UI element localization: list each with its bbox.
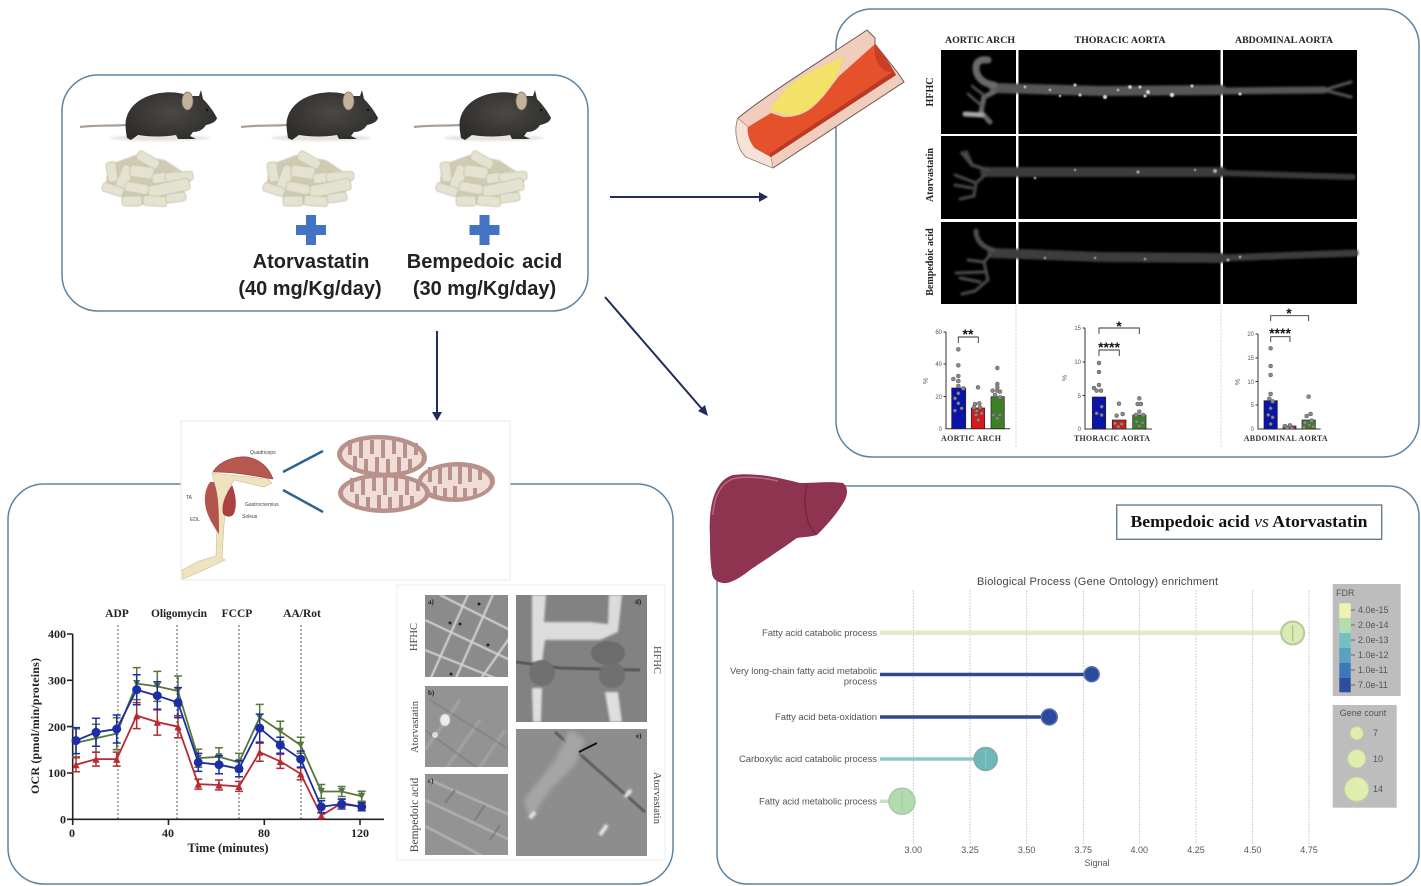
- x-axis tick labels: 4.50: [1244, 845, 1261, 855]
- blue series: [72, 675, 366, 813]
- image: Bempedoic acid aorta: [941, 222, 1357, 304]
- legend: gene count: 10: [1373, 754, 1383, 764]
- bar chart: abdominal aorta: 0: [1251, 427, 1255, 433]
- chart title: Biological Process (Gene Ontology) enrichment: [977, 576, 1218, 588]
- zoom lines: [283, 451, 323, 512]
- legend: gene count: 7: [1373, 728, 1378, 738]
- pellets: control: [101, 150, 193, 207]
- micrograph d: [516, 595, 647, 722]
- micrograph letters: e): [636, 732, 642, 740]
- label: bempedoic acid dose: Bempedoic acid: [407, 251, 562, 273]
- electron micrographs: [397, 585, 665, 860]
- plus icon: bempedoic acid: [470, 215, 500, 245]
- row labels: Atorvastatin: [925, 148, 936, 202]
- legend: gene count: Gene count: [1340, 708, 1387, 718]
- treatment labels: FCCP: [222, 608, 252, 620]
- x-axis tick labels: 120: [351, 826, 369, 840]
- panel: skeletal muscle: [8, 484, 673, 884]
- bar chart: aortic arch: 20: [935, 395, 943, 401]
- treatment labels: Oligomycin: [151, 608, 208, 620]
- row: fatty acid catabolic process: Fatty acid catabolic process: [762, 628, 877, 639]
- bar chart: aortic arch: AORTIC ARCH: [941, 434, 1002, 443]
- bar chart: abdominal aorta: ABDOMINAL AORTA: [1244, 434, 1328, 443]
- icon: leg muscles: [182, 457, 273, 579]
- legend: FDR: 7.0e-11: [1358, 680, 1388, 690]
- bar chart: thoracic aorta: 0: [1078, 427, 1082, 433]
- bar chart: thoracic aorta: 15: [1074, 326, 1082, 332]
- micrograph group labels: Atorvastatin: [651, 772, 662, 825]
- panel: aorta: [836, 9, 1419, 457]
- bar chart: thoracic aorta: *: [1116, 318, 1122, 334]
- y-axis title: OCR (pmol/min/proteins): [28, 658, 42, 794]
- y-axis tick labels: 0: [60, 812, 66, 826]
- bar chart: abdominal aorta: 20: [1247, 332, 1255, 338]
- bar chart: aortic arch: 0: [939, 427, 943, 433]
- bar chart: aortic arch: [923, 326, 1010, 443]
- x-axis tick labels: 3.00: [905, 845, 922, 855]
- column headings: ABDOMINAL AORTA: [1235, 35, 1334, 45]
- row labels: [925, 78, 936, 296]
- label: atorvastatin dose: (40 mg/Kg/day): [238, 278, 382, 300]
- dividers between charts: [1016, 305, 1221, 447]
- y-axis tick labels: 200: [48, 720, 66, 734]
- bar chart: abdominal aorta: 10: [1247, 380, 1255, 386]
- legend: FDR: 2.0e-13: [1358, 635, 1389, 645]
- bar chart: aortic arch: 40: [935, 362, 943, 368]
- mouse: bempedoic acid: [414, 90, 551, 141]
- x-axis tick labels: 4.00: [1131, 845, 1148, 855]
- column headings: [945, 35, 1334, 45]
- icon: mitochondria: [336, 433, 496, 513]
- micrograph letters: [428, 598, 642, 785]
- micrograph e: [516, 729, 647, 856]
- column headings: AORTIC ARCH: [945, 35, 1015, 45]
- arrow: to aorta: [610, 192, 768, 202]
- x-axis tick labels: 80: [258, 826, 270, 840]
- treatment labels: [105, 608, 321, 620]
- legend: FDR: 4.0e-15: [1358, 605, 1389, 615]
- x-axis tick labels: [69, 826, 369, 840]
- injection markers: [118, 625, 301, 819]
- bar chart: thoracic aorta: 5: [1078, 394, 1082, 400]
- title box: Bempedoic acid vs Atorvastatin: [1130, 512, 1368, 531]
- pellets: bempedoic acid: [435, 150, 527, 207]
- axes: [67, 634, 384, 825]
- micrograph a: [425, 595, 508, 677]
- x-axis tick labels: [905, 845, 1318, 855]
- x-axis tick labels: 3.75: [1075, 845, 1092, 855]
- pellets: atorvastatin: [262, 150, 354, 207]
- y-axis tick labels: [48, 627, 66, 826]
- y-axis tick labels: 400: [48, 627, 66, 641]
- row: fatty acid beta-oxidation: Fatty acid beta-oxidation: [775, 712, 877, 723]
- legend: FDR: FDR: [1336, 588, 1355, 598]
- x-axis title: Time (minutes): [188, 841, 268, 855]
- bar chart: aortic arch: %: [923, 378, 930, 384]
- x-axis tick labels: 3.50: [1018, 845, 1035, 855]
- micrograph group labels: HFHC: [409, 623, 420, 651]
- bar chart: thoracic aorta: ****: [1098, 339, 1120, 355]
- legend: FDR: 1.0e-12: [1358, 650, 1389, 660]
- x-axis tick labels: 3.25: [961, 845, 979, 855]
- OCR line chart: [28, 608, 384, 855]
- red series: [72, 703, 366, 819]
- muscle labels: Quadriceps: [250, 450, 276, 456]
- bar chart: abdominal aorta: *: [1286, 305, 1292, 321]
- label: bempedoic acid dose: (30 mg/Kg/day): [413, 278, 556, 300]
- panel: liver enrichment: [710, 474, 1419, 884]
- micrograph group labels: [409, 623, 662, 852]
- micrograph letters: b): [428, 689, 435, 697]
- bar chart: aortic arch: 60: [935, 330, 943, 336]
- legend: FDR: 1.0e-11: [1358, 665, 1388, 675]
- row: fatty acid metabolic process: Fatty acid metabolic process: [759, 796, 877, 808]
- row labels: HFHC: [925, 78, 936, 106]
- bar chart: abdominal aorta: ****: [1269, 325, 1291, 341]
- row: very long-chain fatty acid metabolic process: [730, 666, 1099, 688]
- title box: [1117, 505, 1382, 539]
- row: fatty acid beta-oxidation: [775, 709, 1057, 725]
- legend: FDR: 2.0e-14: [1358, 620, 1389, 630]
- plus icon: atorvastatin: [296, 215, 326, 245]
- row: fatty acid metabolic process: [759, 788, 915, 814]
- micrograph letters: d): [635, 598, 642, 606]
- bar chart: thoracic aorta: %: [1062, 375, 1069, 381]
- bar chart: thoracic aorta: [1062, 318, 1152, 443]
- grid lines: [913, 590, 1309, 845]
- bar chart: aortic arch: **: [963, 326, 974, 342]
- mouse: control: [80, 90, 217, 141]
- panel: diet groups: [62, 75, 588, 311]
- bar chart: thoracic aorta: THORACIC AORTA: [1074, 434, 1150, 443]
- arrow: to liver: [605, 297, 708, 416]
- label: atorvastatin dose: Atorvastatin: [253, 251, 369, 273]
- micrograph letters: a): [428, 598, 434, 606]
- micrograph b: [425, 686, 510, 770]
- muscle labels: EDL: [190, 517, 200, 523]
- arrow: to muscle: [432, 331, 442, 421]
- bar chart: thoracic aorta: 10: [1074, 360, 1082, 366]
- icon: liver: [710, 474, 847, 583]
- bar chart: abdominal aorta: 5: [1251, 403, 1255, 409]
- micrograph c: [425, 774, 510, 860]
- x-axis title: Signal: [1084, 858, 1110, 868]
- micrograph group labels: HFHC: [651, 646, 662, 674]
- micrograph letters: c): [428, 777, 434, 785]
- treatment labels: ADP: [105, 608, 129, 620]
- micrograph group labels: Bempedoic acid: [409, 778, 421, 852]
- row: fatty acid catabolic process: [762, 622, 1304, 644]
- bar chart: abdominal aorta: 15: [1247, 356, 1255, 362]
- muscle labels: Gastrocnemius: [245, 502, 279, 508]
- mouse: atorvastatin: [241, 90, 378, 141]
- x-axis tick labels: 4.25: [1187, 845, 1205, 855]
- bar chart: abdominal aorta: [1235, 305, 1328, 443]
- treatment labels: AA/Rot: [283, 608, 321, 620]
- row: very long-chain fatty acid metabolic process: process: [844, 676, 877, 688]
- row labels: Bempedoic acid: [925, 228, 936, 296]
- green series: [72, 668, 366, 801]
- row: carboxylic acid catabolic process: Carboxylic acid catabolic process: [739, 754, 877, 765]
- legend: FDR: [1333, 584, 1401, 696]
- panel: muscle and mitochondria illustration: [181, 421, 510, 580]
- muscle labels: TA: [186, 495, 193, 501]
- image: HFHC aorta: [941, 50, 1357, 134]
- legend: gene count: 14: [1373, 784, 1383, 794]
- image: Atorvastatin aorta: [941, 136, 1357, 219]
- muscle labels: [186, 450, 279, 523]
- row: very long-chain fatty acid metabolic process: Very long-chain fatty acid metabolic: [730, 666, 877, 677]
- legend: gene count: [1333, 705, 1397, 808]
- bar chart: abdominal aorta: %: [1235, 379, 1242, 385]
- y-axis tick labels: 100: [48, 766, 66, 780]
- micrograph group labels: Atorvastatin: [410, 700, 421, 753]
- y-axis tick labels: 300: [48, 674, 66, 688]
- row: carboxylic acid catabolic process: [739, 748, 997, 770]
- lollipop chart: [730, 576, 1318, 868]
- x-axis tick labels: 40: [162, 826, 174, 840]
- x-axis tick labels: 4.75: [1300, 845, 1318, 855]
- column headings: THORACIC AORTA: [1074, 35, 1166, 45]
- icon: artery with plaque: [736, 30, 904, 168]
- muscle labels: Soleus: [242, 514, 258, 520]
- x-axis tick labels: 0: [69, 826, 75, 840]
